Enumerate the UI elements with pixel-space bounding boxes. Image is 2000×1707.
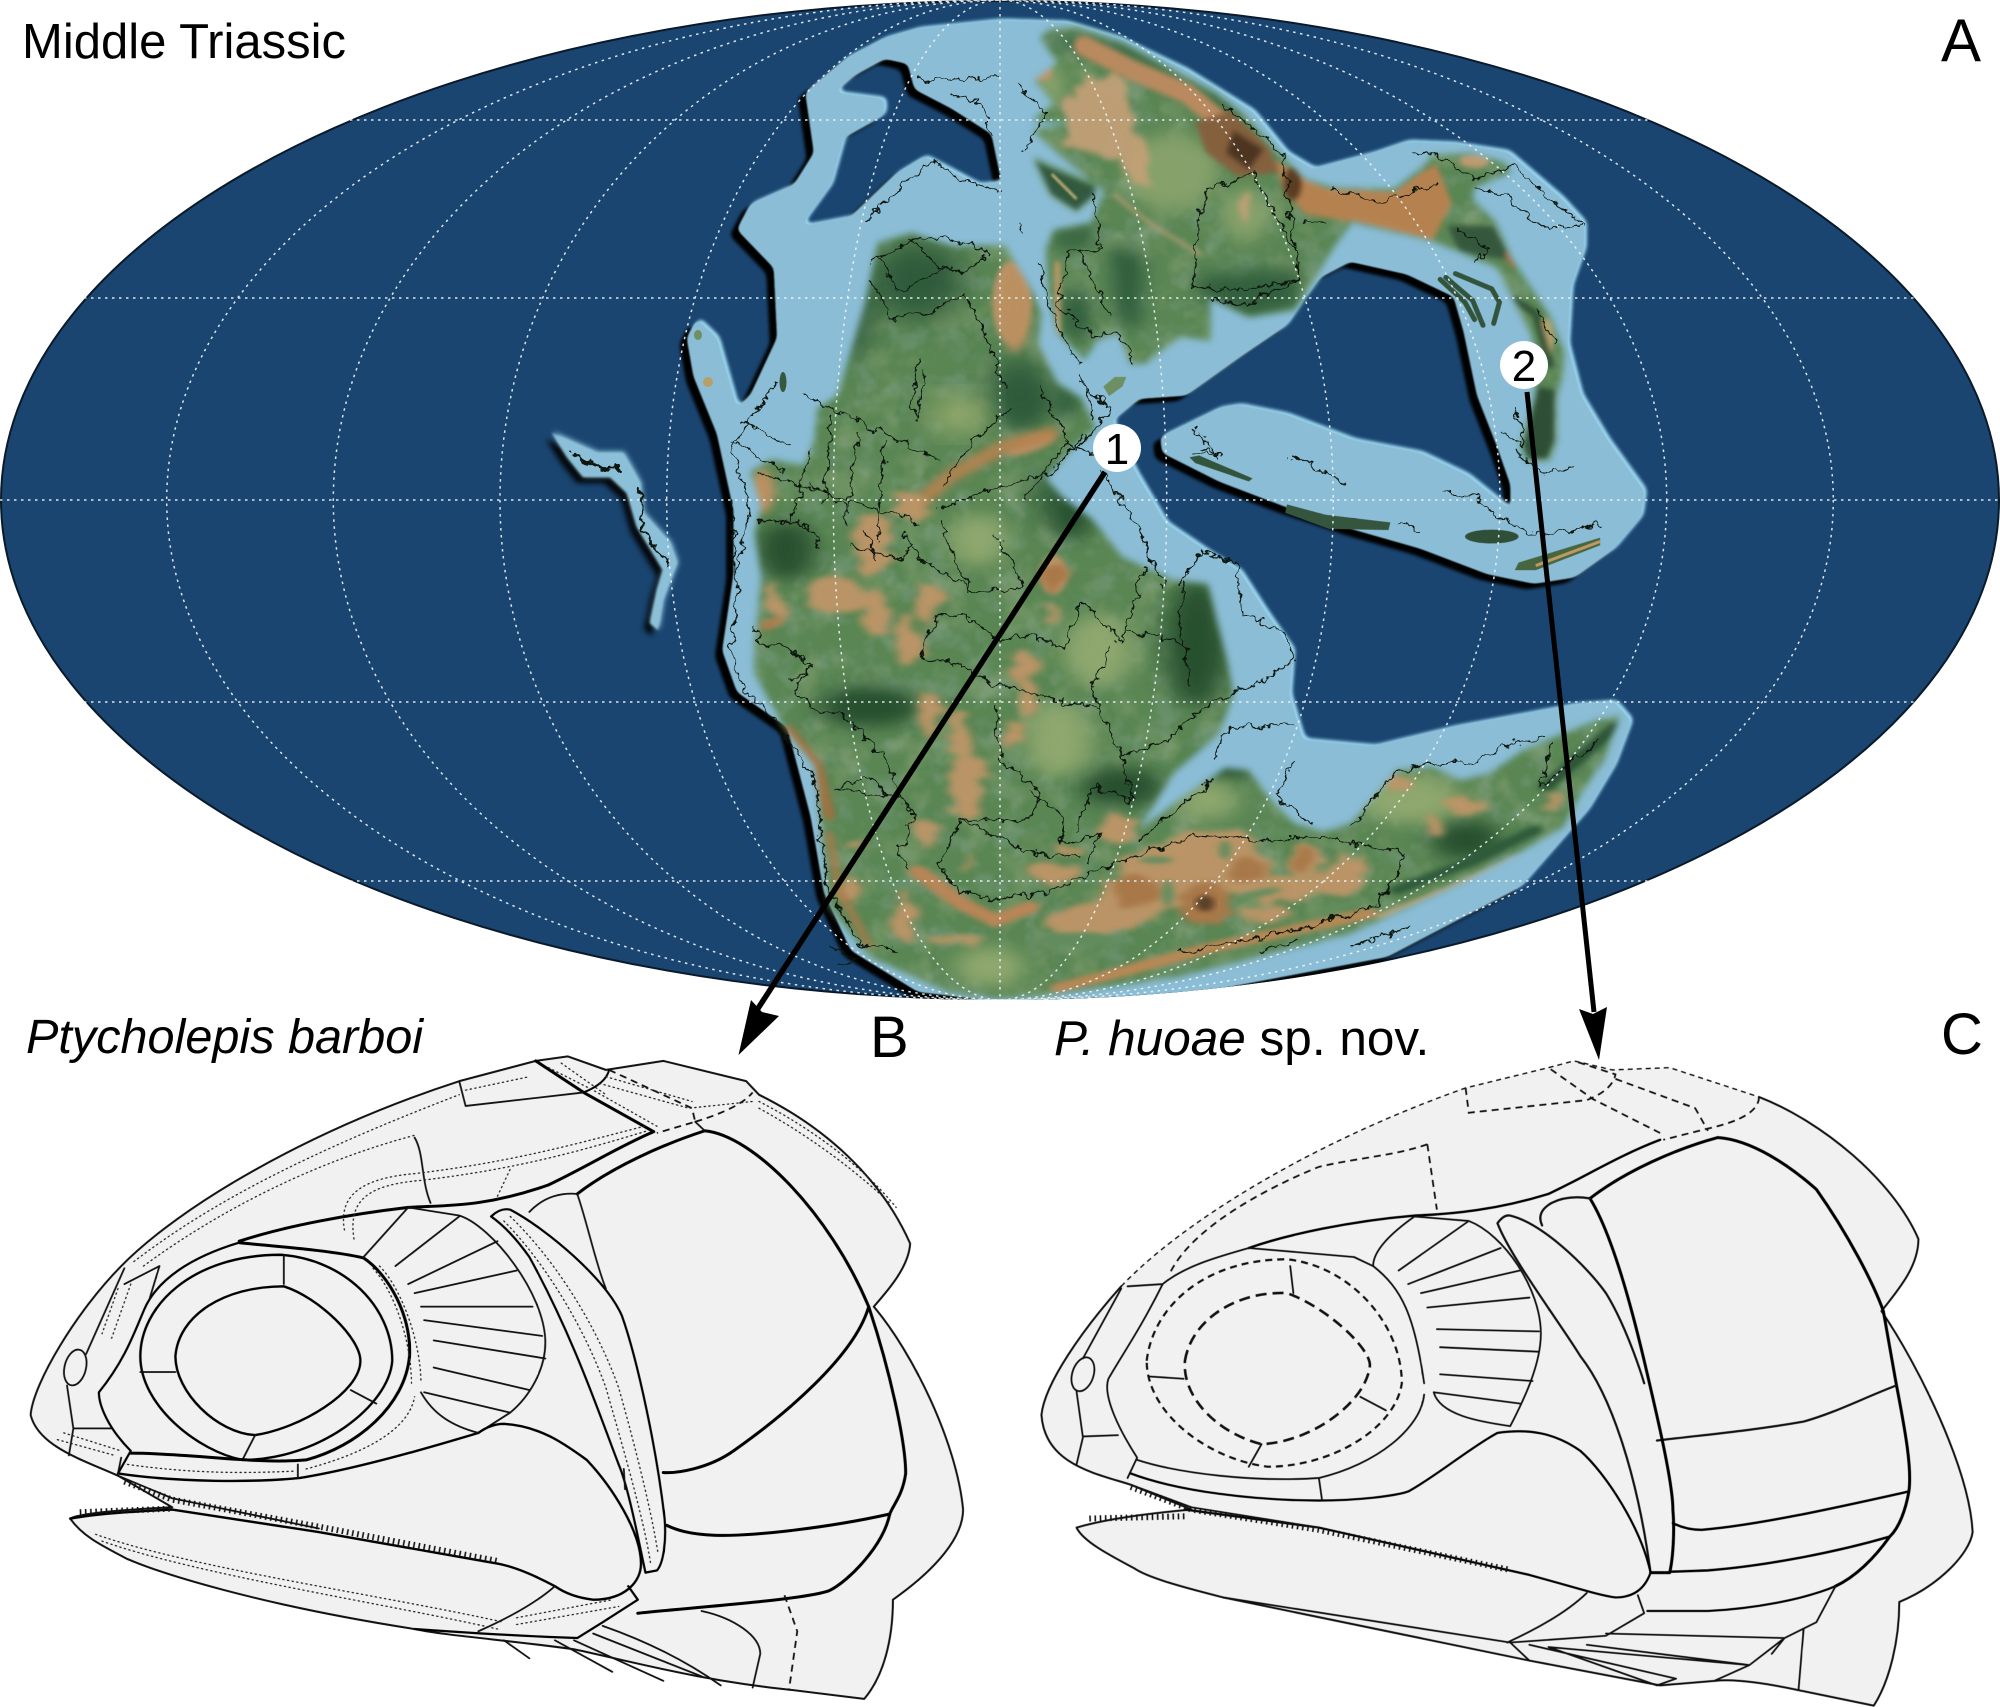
- locality marker 2: [1500, 341, 1548, 391]
- preopercle with sensory pores: [491, 1194, 665, 1573]
- modern coastlines and borders: [730, 77, 1600, 967]
- Gondwana patches: [757, 493, 1615, 988]
- orbit with dashed sclerotic ring: [1107, 1248, 1424, 1478]
- coastlines over the north: [1015, 84, 1600, 586]
- teeth: [1089, 1487, 1510, 1570]
- arrow from locality 2 to P. huoae: [1527, 392, 1607, 1060]
- skull silhouette: [1041, 1061, 1973, 1706]
- coastlines over Gondwana: [731, 500, 1598, 967]
- skull silhouette: [31, 1056, 963, 1699]
- locality marker 1: [1093, 424, 1141, 474]
- northern land patches: [992, 34, 1555, 593]
- isolated western island arc: [546, 432, 678, 636]
- species label: P. huoae sp. nov.: P. huoae sp. nov.: [1054, 1011, 1429, 1066]
- arrow from locality 1 to Ptycholepis barboi: [738, 472, 1105, 1055]
- panel letter A: A: [1941, 7, 1981, 74]
- orbit and sclerotic ring: [99, 1243, 410, 1473]
- second relief texture: [754, 28, 1585, 996]
- small islands in the west: [694, 330, 786, 392]
- species label: Ptycholepis barboi: Ptycholepis barboi: [26, 1010, 424, 1064]
- ocean ellipse: [1, 1, 1999, 999]
- preopercle: [1497, 1197, 1651, 1573]
- Laurentia patches: [750, 242, 1102, 513]
- jaw, maxilla and lower bones: [70, 1424, 641, 1638]
- panel letter B: B: [870, 1005, 909, 1070]
- opercular bones: [577, 1131, 906, 1690]
- snout with nostril: [1068, 1289, 1121, 1464]
- opercular bones: [1590, 1138, 1910, 1611]
- silhouette outline, dashed top: [1121, 1061, 1759, 1286]
- panel B: skull drawing of Ptycholepis barboi: [31, 1056, 963, 1699]
- snout with nostril: [57, 1266, 159, 1473]
- silhouette outline, solid part: [1041, 1097, 1973, 1706]
- shelf glow: [690, 18, 1647, 999]
- lower jaw bones: [1223, 1593, 1644, 1661]
- locality marker 2: 2: [1512, 342, 1536, 391]
- shelf shadow: [679, 26, 1637, 1007]
- land strips on the eastern peninsula: [1052, 174, 1600, 570]
- teeth: [80, 1482, 497, 1561]
- panel letter C: C: [1941, 1002, 1983, 1067]
- dotted graticule: [0, 0, 2000, 1000]
- coastlines over Laurentia and arc: [730, 77, 1112, 574]
- branchiostegal rays: [504, 1626, 721, 1685]
- skull roof with dashed sutures: [1169, 1061, 1759, 1275]
- locality marker 1: 1: [1105, 425, 1129, 474]
- panel A: paleogeographic world map: [0, 0, 2000, 1007]
- shallow shelf sea: [687, 20, 1645, 1001]
- continents and shelf seas: [546, 0, 1700, 1007]
- shelf sea around Pangaea: [679, 18, 1647, 1007]
- mottled relief texture: [754, 28, 1614, 998]
- suborbital bones: [118, 1207, 545, 1481]
- land colours: [746, 22, 1624, 1000]
- title: Middle Triassic: Middle Triassic: [22, 15, 346, 69]
- panel C: skull drawing of P. huoae: [1041, 1061, 1973, 1706]
- skull roof bones: [134, 1061, 896, 1266]
- branchiostegal rays: [1529, 1586, 1836, 1690]
- suborbital bones: [1131, 1216, 1651, 1597]
- base land fill: [746, 22, 1624, 1000]
